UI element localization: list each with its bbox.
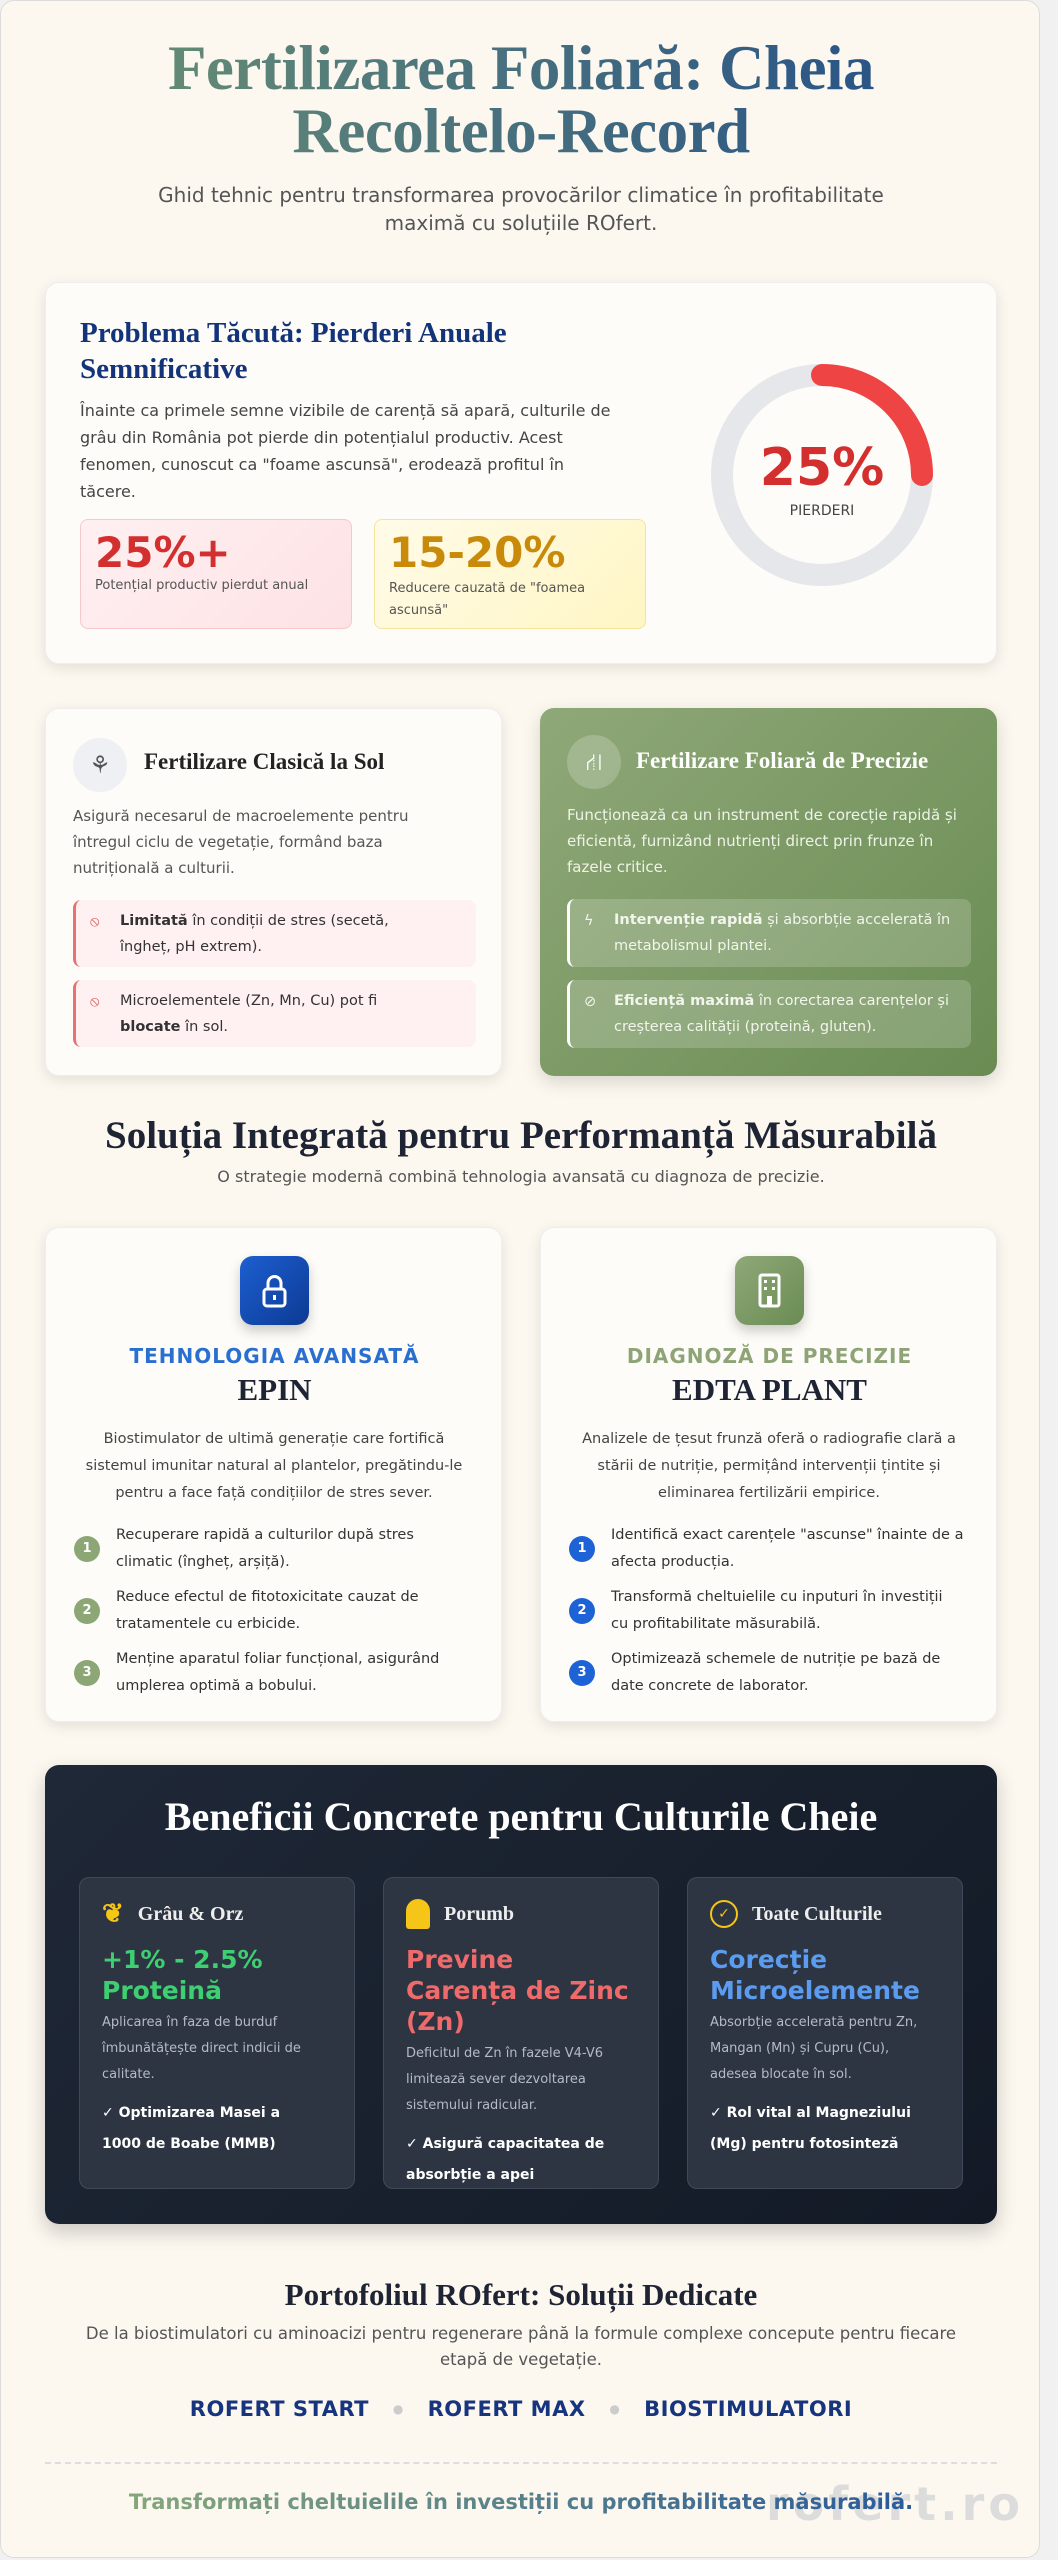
stat: 25%+: 25%+ [95, 528, 231, 577]
section heading: solution: Soluția Integrată pentru Performanță Măsurabilă [105, 1114, 937, 1157]
card: all crops [687, 1877, 963, 2189]
card: all crops: ✓ Rol vital al Magneziului (Mg) pentru fotosinteză [710, 2105, 911, 2152]
subtitle: Ghid tehnic pentru transformarea provocărilor climatice în profitabilitate maximă cu soluțiile ROfert. [158, 183, 884, 235]
list EDTA: 1 [577, 1541, 587, 1556]
stat: 15-20%: Reducere cauzată de "foamea ascunsă" [389, 581, 585, 618]
problem text: Înainte ca primele semne vizibile de carență să apară, culturile de grâu din România pot pierde din potențialul productiv. Acest fenomen, cunoscut ca "foame ascunsă", erodează profitul în tăcere. [80, 401, 610, 501]
panel: EDTA PLANT: Optimizează schemele de nutriție pe bază de date concrete de laborator. [611, 1651, 940, 1694]
desc EDTA: Analizele de țesut frunză oferă o radiografie clară a stării de nutriție, permițând intervenții țintite și eliminarea fertilizării empirice. [582, 1431, 956, 1501]
icon: soil [73, 738, 127, 792]
card: wheat: ❦ [102, 1899, 124, 1928]
card: corn [383, 1877, 659, 2189]
pill: blocked [73, 980, 476, 1047]
list EPIN: 1 [82, 1541, 92, 1556]
list EDTA: Identifică exact carențele "ascunse" înainte de a afecta producția. [611, 1527, 963, 1570]
panel: benefits [45, 1765, 997, 2224]
pill: blocked: Microelementele (Zn, Mn, Cu) pot fi blocate în sol. [120, 993, 377, 1035]
label tech: TEHNOLOGIA AVANSATĂ [129, 1344, 420, 1368]
card: corn: Previne [406, 1945, 513, 1974]
panel: EPIN: Menține aparatul foliar funcțional, asigurând umplerea optimă a bobului. [116, 1651, 439, 1694]
watermark: rofert.ro [766, 2477, 1024, 2531]
panel: EPIN [45, 1227, 502, 1722]
desc EPIN: Biostimulator de ultimă generație care fortifică sistemul imunitar natural al plantelor, pregătindu-le pentru a face față condițiilor de stres sever. [86, 1431, 462, 1501]
card: corn: Porumb [444, 1902, 514, 1924]
icon: foliar: ⛙ [586, 748, 602, 776]
panel: EPIN: 2 [82, 1603, 92, 1618]
card: corn: Deficitul de Zn în fazele V4-V6 limitează sever dezvoltarea sistemului radicular. [406, 2046, 603, 2113]
panel: EPIN: Reduce efectul de fitotoxicitate cauzat de tratamentele cu erbicide. [116, 1589, 419, 1632]
pill: fast: Intervenție rapidă și absorbție accelerată în metabolismul plantei. [614, 912, 950, 954]
title: Recoltelo-Record [292, 96, 750, 166]
list EPIN: Recuperare rapidă a culturilor după stres climatic (îngheț, arșiță). [116, 1527, 414, 1570]
card: wheat: Grâu & Orz [138, 1902, 243, 1924]
heading foliar: Fertilizare Foliară de Precizie [636, 748, 928, 773]
icon: lock [240, 1256, 309, 1325]
text classic: Asigură necesarul de macroelemente pentru întregul ciclu de vegetație, formând baza nutrițională a culturii. [73, 807, 408, 877]
name EPIN: EPIN [237, 1372, 312, 1407]
section subtitle: O strategie modernă combină tehnologia avansată cu diagnoza de precizie. [217, 1167, 825, 1186]
card: corn: Carența de Zinc [406, 1976, 629, 2005]
pill: limited: Limitată în condiții de stres (secetă, îngheț, pH extrem). [120, 913, 389, 955]
title: Fertilizarea Foliară: Cheia [168, 33, 874, 103]
panel: EDTA PLANT: 2 [577, 1603, 587, 1618]
text foliar: Funcționează ca un instrument de corecție rapidă și eficientă, furnizând nutrienți direct prin frunze în fazele critice. [567, 806, 957, 876]
footer tagline: Transformați cheltuielile în investiții cu profitabilitate măsurabilă. [129, 2490, 913, 2514]
pill: limited [73, 900, 476, 967]
label diag: DIAGNOZĂ DE PRECIZIE [627, 1344, 912, 1368]
card: wheat: Aplicarea în faza de burduf îmbunătățește direct indicii de calitate. [102, 2015, 301, 2082]
icon: soil: ⚘ [89, 751, 111, 779]
stat: 25%+: Potențial productiv pierdut anual [95, 578, 308, 593]
pill: fast: ϟ [584, 913, 594, 929]
donut chart: PIERDERI [790, 503, 854, 519]
name EDTA: EDTA PLANT [672, 1372, 867, 1407]
card: wheat [79, 1877, 355, 2189]
donut chart: 25% [760, 438, 884, 498]
panel: foliar precision [540, 708, 997, 1076]
panel: EDTA PLANT: 3 [577, 1665, 587, 1680]
icon: foliar [567, 735, 621, 789]
title [21, 37, 1021, 163]
pill: efficiency: Eficiență maximă în corectarea carențelor și creșterea calității (proteină, gluten). [614, 993, 949, 1035]
panel: EDTA PLANT [540, 1227, 997, 1722]
pill: efficiency [567, 980, 971, 1048]
card: all crops: Absorbție accelerată pentru Zn, Mangan (Mn) și Cupru (Cu), adesea blocate în sol. [710, 2015, 917, 2082]
card: corn: (Zn) [406, 2007, 465, 2036]
pill: efficiency: ⊘ [584, 994, 596, 1010]
card: corn: ✓ Asigură capacitatea de absorbție a apei [406, 2136, 604, 2183]
donut chart [711, 364, 933, 586]
stat: 25%+ [80, 519, 352, 629]
card: wheat: ✓ Optimizarea Masei a 1000 de Boabe (MMB) [102, 2105, 280, 2152]
pill: blocked: ⦸ [90, 994, 99, 1010]
pill: limited: ⦸ [90, 914, 99, 930]
heading classic: Fertilizare Clasică la Sol [144, 749, 384, 774]
card: wheat: +1% - 2.5% Proteină [102, 1945, 263, 2005]
stat: 15-20% [374, 519, 646, 629]
panel: EDTA PLANT: Transformă cheltuielile cu inputuri în investiții cu profitabilitate măsurabilă. [611, 1589, 943, 1632]
card: all crops: Corecție Microelemente [710, 1945, 920, 2005]
panel: problem [45, 282, 997, 664]
icon: building [735, 1256, 804, 1325]
card: all crops: ✓ [718, 1906, 730, 1922]
pill: fast [567, 899, 971, 967]
stat: 15-20%: 15-20% [389, 528, 565, 577]
product links: ROFERT START ● ROFERT MAX ● BIOSTIMULATORI [190, 2397, 852, 2421]
panel: EPIN: 3 [82, 1665, 92, 1680]
portfolio text: De la biostimulatori cu aminoacizi pentru regenerare până la formule complexe concepute pentru fiecare etapă de vegetație. [86, 2324, 956, 2369]
card: all crops: Toate Culturile [752, 1902, 882, 1924]
benefits heading: Beneficii Concrete pentru Culturile Cheie [165, 1794, 877, 1839]
panel: classic soil fertilization [45, 708, 502, 1076]
problem heading: Problema Tăcută: Pierderi Anuale Semnificative [80, 317, 507, 385]
portfolio heading: Portofoliul ROfert: Soluții Dedicate [285, 2277, 757, 2312]
